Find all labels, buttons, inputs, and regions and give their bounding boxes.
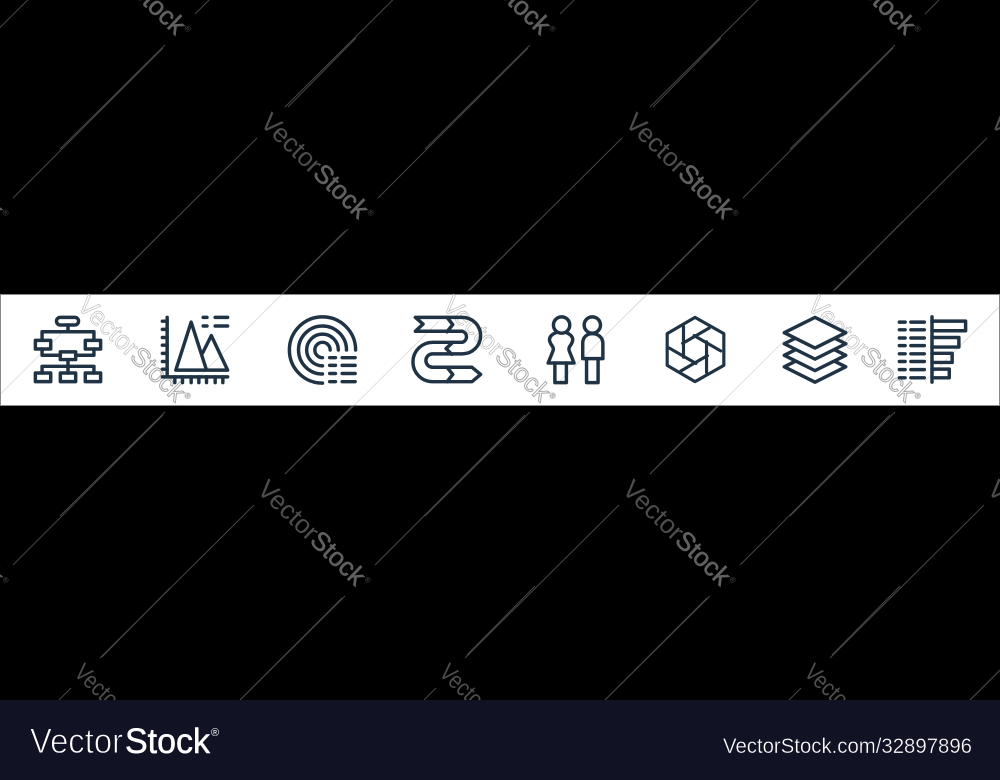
- footer logo: Vector: [30, 722, 123, 761]
- icon: horizontal bar chart with legend: [899, 317, 966, 382]
- footer logo: ®: [211, 727, 219, 739]
- watermark: ®: [362, 575, 373, 585]
- icon: flowchart: [35, 317, 101, 382]
- watermark: Vecto: [69, 659, 124, 713]
- watermark: VectorStock: [252, 474, 373, 592]
- band watermark: VectorStock: [72, 290, 193, 408]
- icon: concentric arc chart: [289, 317, 356, 383]
- icon: mountain area chart: [162, 317, 228, 383]
- watermark: ®: [912, 24, 923, 34]
- watermark: VectorStock: [617, 474, 738, 592]
- watermark: [0, 474, 15, 596]
- band watermark: VectorStock: [802, 290, 923, 408]
- icon: stacked layers: [784, 317, 846, 382]
- icon: camera aperture hexagon: [667, 317, 724, 382]
- watermark: [0, 107, 15, 229]
- watermark: [437, 0, 562, 45]
- watermark: VectorStock: [255, 107, 376, 225]
- footer image id: VectorStock.com/32897896: [723, 735, 972, 758]
- band watermark: ®: [547, 391, 558, 401]
- watermark: Vecto: [434, 659, 489, 713]
- band watermark: ®: [912, 391, 923, 401]
- watermark: ®: [182, 24, 193, 34]
- icon: woman and man: [548, 317, 603, 383]
- white icon band: [0, 294, 1000, 406]
- band watermark: ®: [182, 391, 193, 401]
- watermark: [72, 0, 197, 45]
- watermark: ®: [0, 208, 11, 218]
- footer logo: [30, 722, 219, 761]
- watermark: VectorStock: [620, 107, 741, 225]
- watermark: ®: [365, 208, 376, 218]
- footer bar: [0, 700, 1000, 780]
- footer logo: Stock: [125, 722, 210, 761]
- watermark: ®: [547, 24, 558, 34]
- band watermark: VectorStock: [437, 290, 558, 408]
- watermark: [802, 0, 927, 45]
- icon: winding ribbon: [413, 317, 481, 382]
- watermark: ®: [727, 575, 738, 585]
- watermark: ®: [730, 208, 741, 218]
- watermark: Vecto: [799, 659, 854, 713]
- watermark: ®: [0, 575, 11, 585]
